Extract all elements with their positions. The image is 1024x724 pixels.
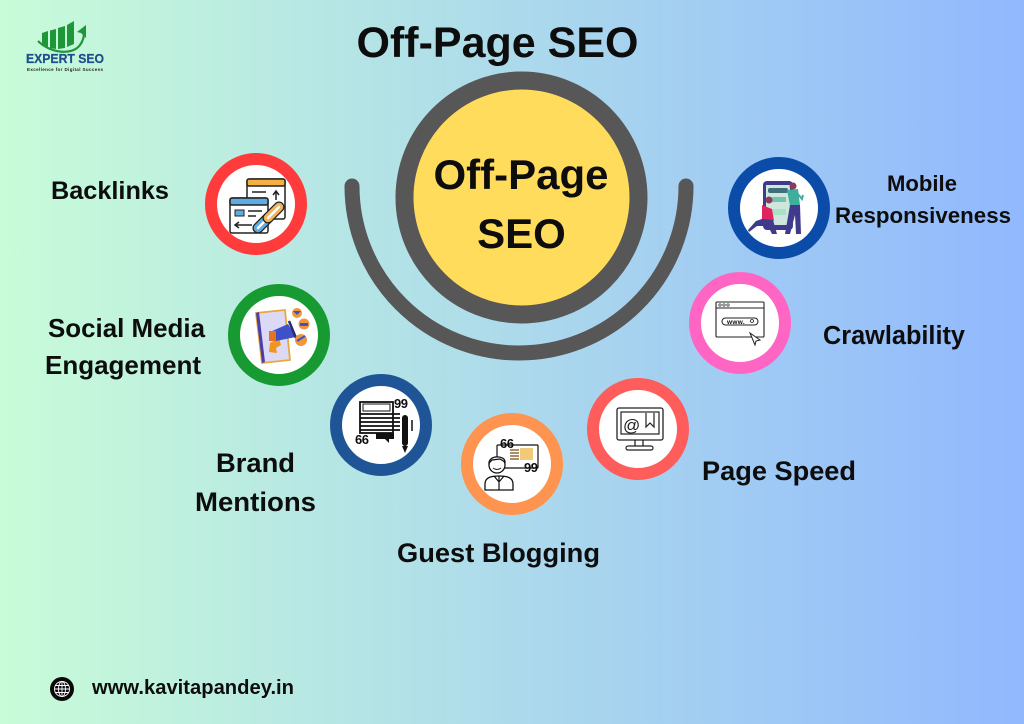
label: Brand Mentions: Brand xyxy=(216,448,295,478)
icon: page speed monitor: @ xyxy=(623,416,640,435)
item: Page Speed xyxy=(593,384,856,486)
icon: crawlability browser xyxy=(695,278,785,368)
item: Backlinks xyxy=(51,159,301,249)
icon: backlinks xyxy=(211,159,301,249)
icon: guest blogging: 99 xyxy=(524,460,538,475)
label: Crawlability: Crawlability xyxy=(823,322,966,350)
label: Social Media Engagement: Engagement xyxy=(45,350,201,380)
icon: brand mentions: 99 xyxy=(394,396,408,411)
central circle xyxy=(404,80,638,314)
label: Brand Mentions: Mentions xyxy=(195,487,316,517)
icon: guest blogging: 66 xyxy=(500,436,514,451)
label: Social Media Engagement: Social Media xyxy=(48,313,206,343)
outer arc xyxy=(352,186,686,353)
label: Brand Mentions xyxy=(195,448,316,517)
icon: guest blogging xyxy=(467,419,557,509)
label: Mobile Responsiveness: Mobile xyxy=(887,171,957,196)
icon: crawlability browser: www. xyxy=(726,319,745,326)
label: Backlinks: Backlinks xyxy=(51,177,169,205)
icon: brand mentions xyxy=(336,380,426,470)
item: Guest Blogging xyxy=(397,419,600,568)
label: Guest Blogging: Guest Blogging xyxy=(397,538,600,568)
item: Crawlability xyxy=(695,278,966,368)
item: Social Media Engagement xyxy=(45,290,324,380)
footer: website xyxy=(50,676,294,701)
title: Off-Page SEO xyxy=(357,19,638,67)
central circle: Off-Page xyxy=(433,151,609,198)
website url: www.kavitapandey.in xyxy=(91,676,294,699)
icon: social media megaphone xyxy=(234,290,324,380)
central circle: SEO xyxy=(477,210,566,257)
label: Social Media Engagement xyxy=(45,313,206,380)
logo: Expert SEO: Excellence for Digital Success xyxy=(27,67,103,72)
label: Page Speed: Page Speed xyxy=(702,456,856,486)
logo: Expert SEO xyxy=(26,21,104,72)
item: Mobile Responsiveness xyxy=(734,163,1011,253)
icon: page speed monitor xyxy=(593,384,683,474)
icon: brand mentions: 66 xyxy=(355,432,369,447)
icon: mobile responsiveness xyxy=(734,163,824,253)
item: Brand Mentions xyxy=(195,380,426,517)
label: Mobile Responsiveness: Responsiveness xyxy=(835,203,1011,228)
label: Mobile Responsiveness xyxy=(835,171,1011,228)
logo: Expert SEO: EXPERT SEO xyxy=(26,51,104,66)
icon: globe xyxy=(50,677,74,701)
